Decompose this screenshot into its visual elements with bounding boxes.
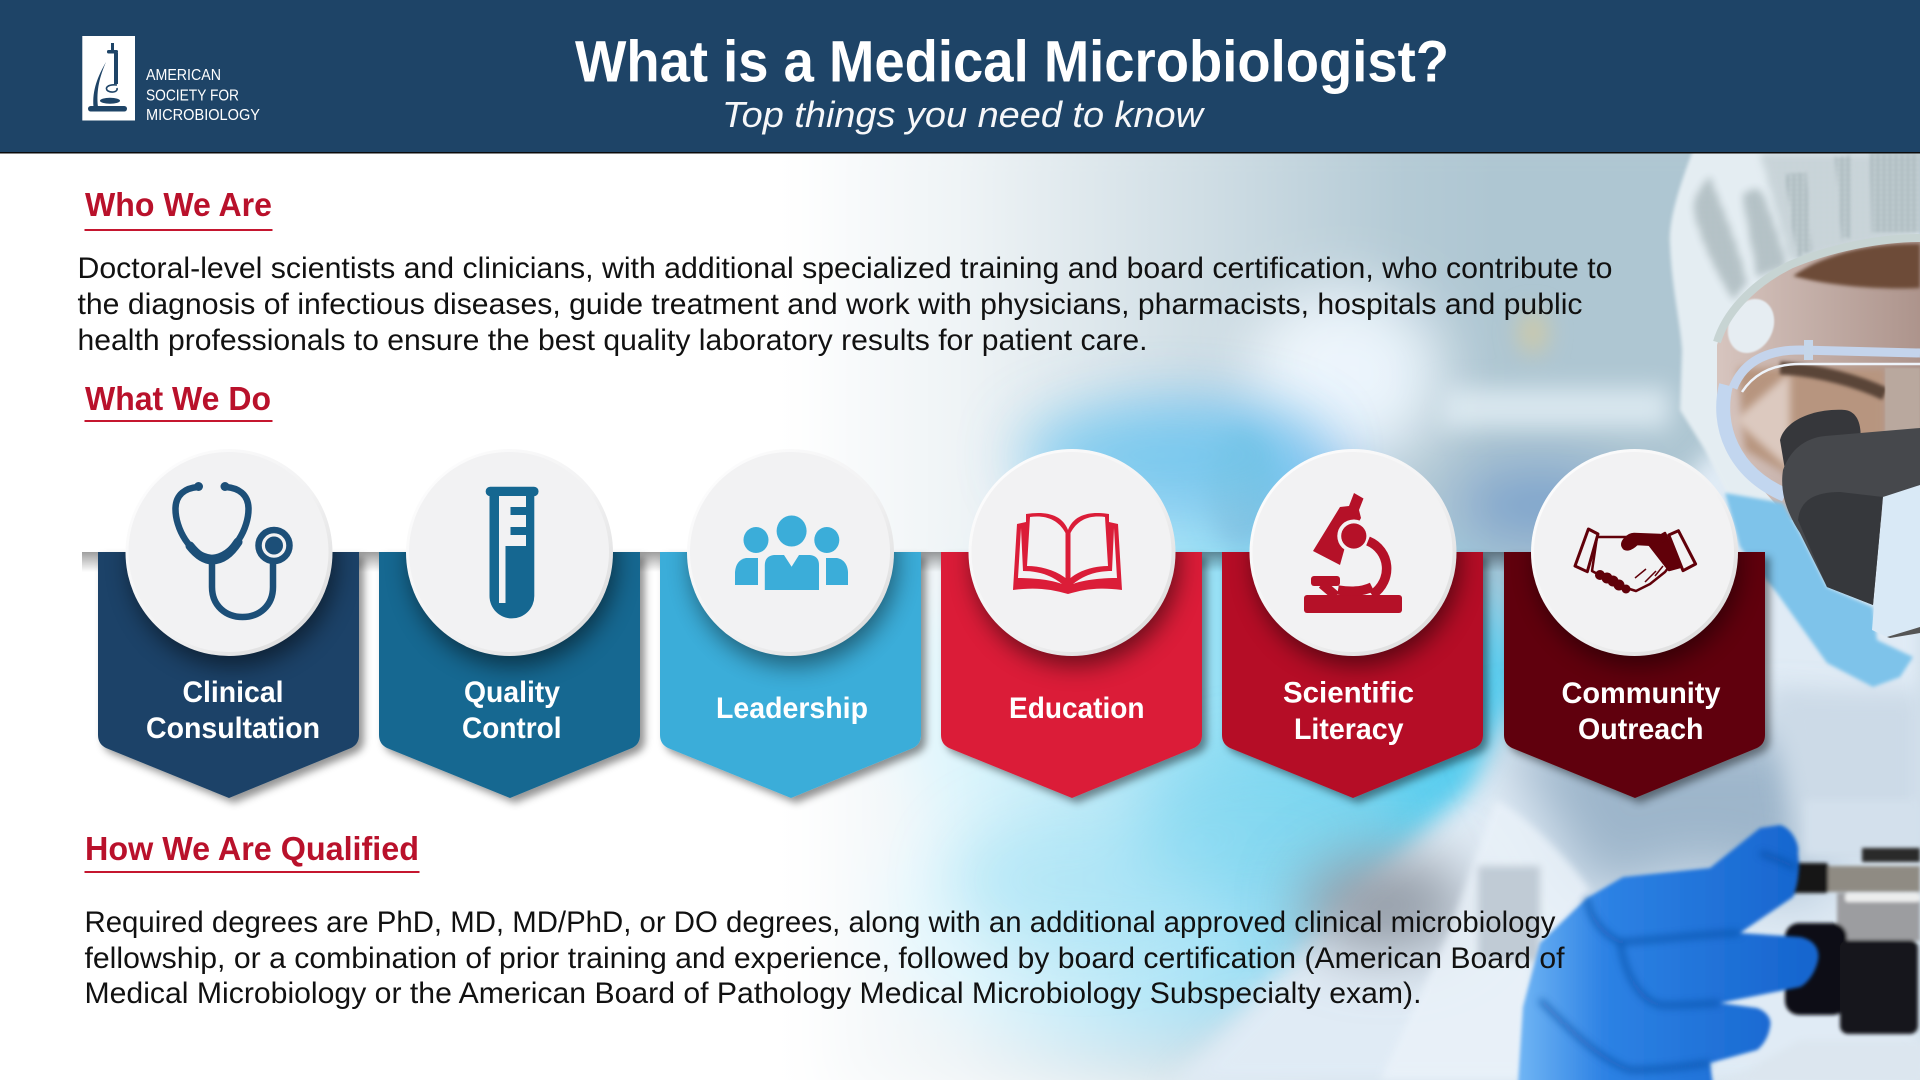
label: Control [462,712,562,745]
icon: open book [1013,513,1122,594]
card: community outreach [1504,449,1765,798]
heading: who we are: Who We Are [85,187,272,224]
lab coat [1165,440,1920,1080]
label: Clinical [182,676,284,709]
card: scientific literacy [1222,449,1483,798]
qualification paragraph: fellowship, or a combination of prior training and experience, followed by board certification (American Board of [84,942,1565,975]
qualification paragraph [84,906,1565,1010]
logo text: AMERICAN [146,67,221,84]
card: education [941,449,1202,798]
icon: handshake [1575,529,1696,594]
logo text: SOCIETY FOR [146,88,239,104]
microscope stage and knobs [1767,848,1920,1034]
who we are paragraph [78,252,1612,357]
card: clinical consultation [98,449,359,798]
ribbon shadow [82,552,1765,572]
heading: what we do: What We Do [85,381,271,418]
hood [1668,154,1920,468]
background photo: scientist at microscope [850,154,1920,1080]
blurred lab backdrop [800,100,1920,1080]
subtitle: Top things you need to know [722,94,1205,135]
who we are paragraph: the diagnosis of infectious diseases, guide treatment and work with physicians, pharmacists, hospitals and public [78,288,1583,321]
logo text: MICROBIOLOGY [146,107,260,124]
label: Quality [464,676,560,709]
section: how we are qualified [84,831,1565,1010]
label: Community [1562,677,1721,710]
logo: American Society for Microbiology [82,36,260,124]
card: leadership [660,449,921,798]
blue and cyan glow over fade [950,405,1400,950]
logo text [146,67,260,124]
icon: microscope [1304,493,1402,613]
microscope eyepiece [1780,410,1920,638]
label: Education [1009,692,1144,725]
icon: test tube [486,487,538,618]
label: Literacy [1294,713,1404,746]
section: what we do [82,381,1765,798]
who we are paragraph: health professionals to ensure the best quality laboratory results for patient care. [78,324,1148,357]
qualification paragraph: Medical Microbiology or the American Board of Pathology Medical Microbiology Subspecialty exam). [84,977,1422,1010]
blue glove [1518,825,1818,1080]
white fade on left [764,154,1438,1080]
logo mark [82,36,135,120]
label: Leadership [716,692,868,725]
face and goggles [1717,238,1920,520]
label [1283,676,1414,746]
label [146,676,320,745]
title: What is a Medical Microbiologist? [575,30,1449,94]
card: quality control [379,449,640,798]
icon: people [735,516,848,590]
icon: stethoscope [175,482,290,617]
label: Scientific [1283,676,1414,710]
section: who we are [78,187,1612,357]
heading: how we are qualified: How We Are Qualified [85,831,419,868]
label [1562,677,1721,746]
qualification paragraph: Required degrees are PhD, MD, MD/PhD, or DO degrees, along with an additional approved clinical microbiology [84,906,1556,939]
label: Outreach [1578,713,1704,746]
header bar [0,0,1920,154]
surgical mask [1725,493,1913,687]
label [462,676,562,745]
who we are paragraph: Doctoral-level scientists and clinicians, with additional specialized training and board certification, who contribute to [78,252,1612,285]
label: Consultation [146,712,320,745]
